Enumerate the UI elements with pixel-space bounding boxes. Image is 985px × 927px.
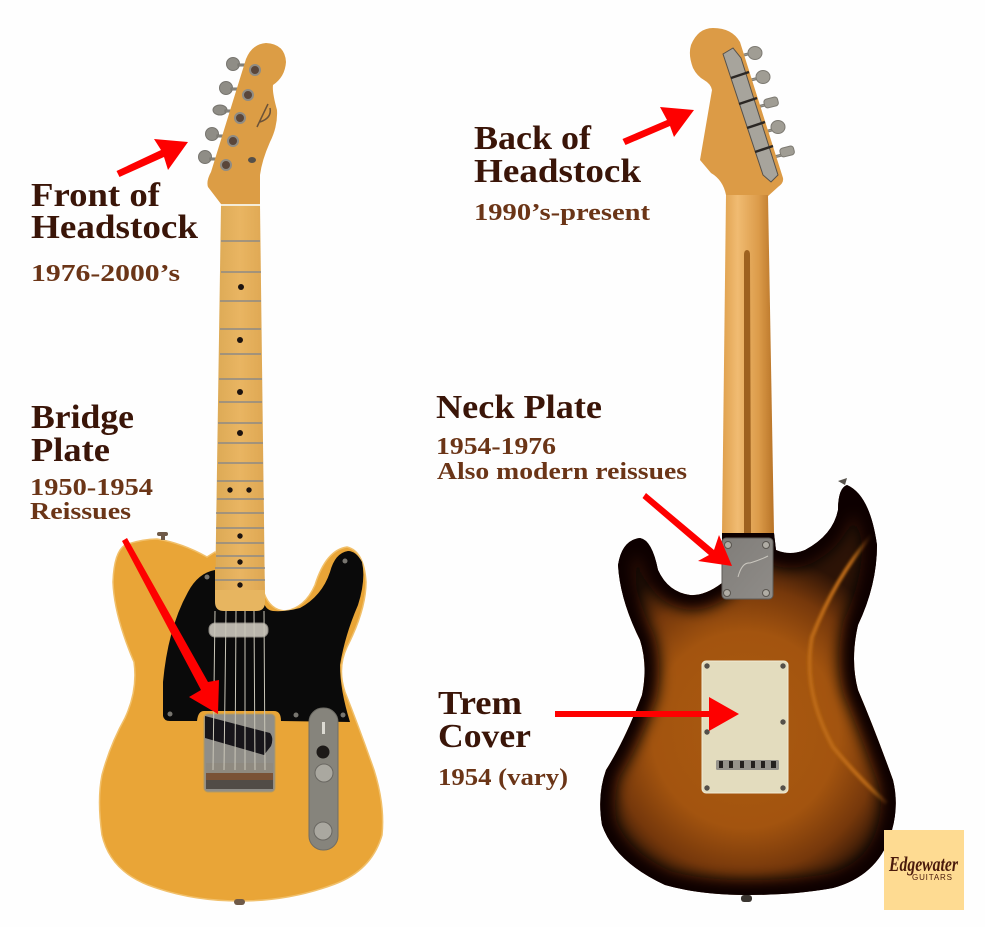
arrow: back of headstock: [622, 107, 694, 145]
tele neck pickup: [209, 623, 268, 637]
strat neck: [722, 195, 774, 533]
tele end pin and strap button: [157, 532, 245, 905]
tele tuner posts: [221, 65, 260, 170]
label: back of headstock: [474, 120, 650, 226]
tele pickguard screws: [168, 558, 348, 718]
heading: bridge plate: Plate: [31, 432, 110, 469]
dates: bridge plate: Reissues: [30, 499, 131, 525]
tele neck heel over pickguard: [215, 590, 265, 611]
heading: bridge plate: Bridge: [31, 399, 134, 436]
date: 1976-2000's: 1976-2000’s: [31, 261, 180, 287]
tele strings: [213, 611, 265, 770]
strat neck plate: [722, 538, 773, 599]
heading: front of headstock: Front of: [31, 177, 161, 214]
label: front of headstock: [31, 177, 198, 287]
tele frets: [215, 205, 265, 602]
heading: trem cover: [438, 685, 531, 755]
arrow: bridge plate: [122, 538, 219, 714]
tele neck: [215, 205, 265, 611]
tele fret dots: [227, 284, 252, 588]
tele body: [100, 539, 383, 901]
heading: back of headstock: [474, 120, 641, 190]
tele saddles: [206, 773, 273, 780]
heading: bridge plate: [31, 399, 134, 469]
tele bridge pickup: [205, 716, 272, 755]
strat trem cover: [702, 661, 788, 793]
tele control plate: [309, 708, 338, 850]
strat skunk stripe: [744, 250, 751, 533]
label: neck plate: [436, 389, 687, 485]
dates: bridge plate: [30, 475, 153, 525]
heading: back of headstock: Headstock: [474, 153, 641, 190]
heading: trem cover: Cover: [438, 718, 531, 755]
heading: trem cover: Trem: [438, 685, 522, 722]
date: 1954 (vary): 1954 (vary): [438, 765, 568, 791]
heading: neck plate: Neck Plate: [436, 389, 602, 426]
logo: Edgewater Guitars: GUITARS: [912, 873, 952, 882]
strat tuner plate: [723, 48, 778, 182]
logo: Edgewater Guitars: [884, 830, 964, 910]
guitar: stratocaster back: [590, 28, 910, 905]
tele bridge plate: [204, 714, 275, 792]
tele neck over body: [215, 550, 265, 611]
trem string slot: [716, 760, 779, 770]
strat tuner pegs: [740, 46, 795, 159]
strat headstock: [690, 28, 783, 215]
dates: neck plate: 1954-1976: [436, 434, 556, 460]
arrow: front of headstock: [116, 139, 188, 177]
strat wear highlight: [810, 535, 887, 803]
heading: front of headstock: [31, 177, 198, 246]
tele headstock: [207, 43, 286, 204]
tele pickguard: [163, 551, 363, 722]
arrow: trem cover: [555, 697, 739, 731]
dates: bridge plate: 1950-1954: [30, 475, 153, 501]
tele tuning machines: [198, 58, 250, 164]
logo: Edgewater Guitars: Edgewater: [888, 852, 959, 876]
dates: neck plate: Also modern reissues: [437, 459, 687, 485]
label: trem cover: [438, 685, 568, 791]
strat black edge: [600, 485, 896, 895]
strat strap buttons: [741, 478, 847, 902]
heading: back of headstock: Back of: [474, 120, 592, 157]
tele headstock logo: [257, 104, 270, 127]
label: bridge plate: [30, 399, 153, 525]
heading: front of headstock: Headstock: [31, 209, 198, 246]
arrow: neck plate: [642, 493, 732, 566]
dates: neck plate: [436, 434, 687, 485]
date: 1990's-present: 1990’s-present: [474, 200, 650, 226]
strat body: [600, 485, 896, 895]
guitar: telecaster front: [100, 43, 383, 905]
